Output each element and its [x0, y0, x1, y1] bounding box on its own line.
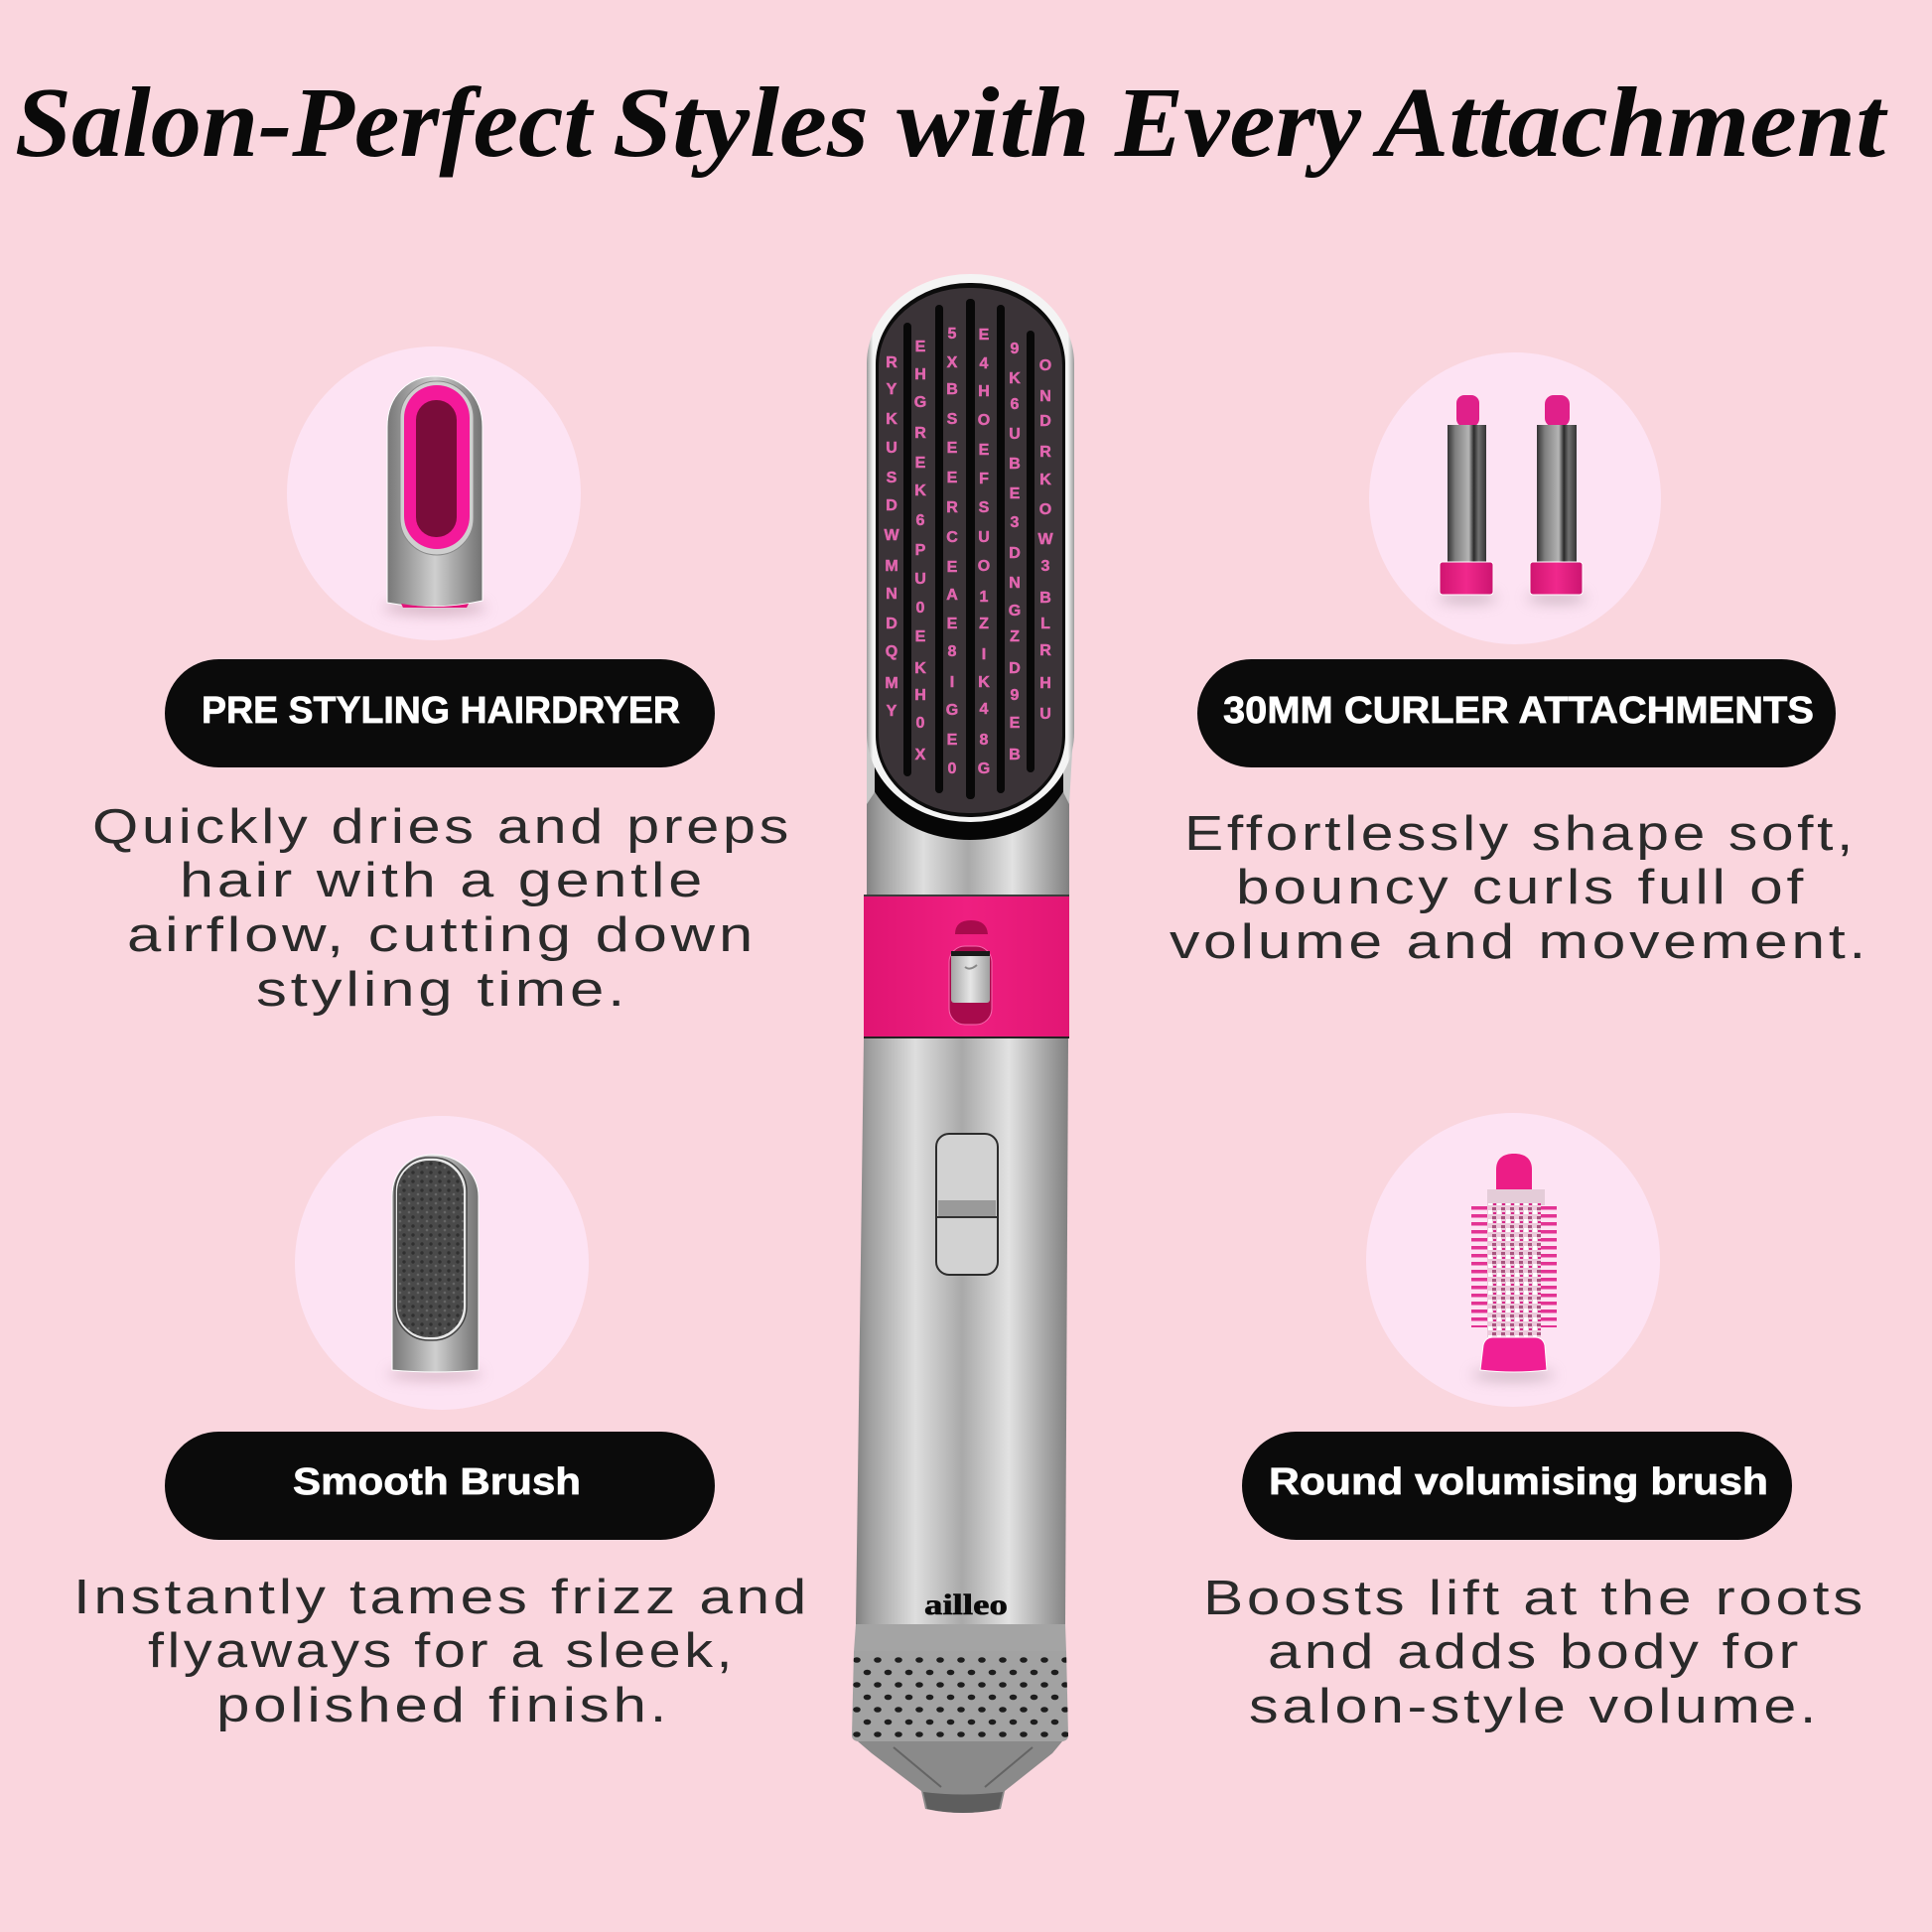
neck side highlights [867, 735, 1073, 804]
brush head pink bristle markings: E4HOEFSUO1ZIK48G [978, 327, 990, 777]
description: smooth brush: Instantly tames frizz and [73, 1571, 810, 1624]
description: round volumising brush: Boosts lift at the roots [1203, 1572, 1866, 1625]
label pill: smooth brush [165, 1432, 715, 1540]
logo: ailleo: ailleo [924, 1588, 1008, 1621]
description: pre styling hairdryer: styling time. [256, 963, 628, 1017]
label pill: round volumising brush: Round volumising brush [1269, 1461, 1768, 1503]
description: 30mm curler attachments: bouncy curls full of [1236, 861, 1807, 914]
label pill: pre styling hairdryer: PRE STYLING HAIRDRYER [202, 690, 680, 732]
label pill: round volumising brush [1242, 1432, 1792, 1540]
lower metal body [856, 1038, 1068, 1624]
description: round volumising brush: and adds body for [1268, 1625, 1802, 1679]
slider switch on pink band [949, 920, 992, 1025]
icon: smooth brush attachment [295, 1116, 589, 1410]
brush head pink bristle markings: 5XBSEERCEAE8IGE0 [946, 326, 958, 777]
panel: pre styling hairdryer [92, 346, 792, 1017]
label pill: smooth brush: Smooth Brush [293, 1461, 581, 1503]
brush head pink bristle markings: ONDRKOW3BLRHU [1037, 357, 1053, 723]
description: smooth brush [73, 1571, 810, 1732]
title: Every [1114, 67, 1362, 178]
title: Attachment [1372, 67, 1888, 178]
icon: round volumising brush attachment [1366, 1113, 1660, 1407]
description: pre styling hairdryer: hair with a gentle [180, 854, 706, 907]
description: pre styling hairdryer [92, 800, 792, 1017]
black crescent under brush head [874, 745, 1064, 840]
description: round volumising brush: salon-style volume. [1249, 1680, 1820, 1733]
icon: two curler barrels [1369, 352, 1661, 644]
description: smooth brush: polished finish. [216, 1679, 670, 1732]
description: 30mm curler attachments: volume and movement. [1170, 915, 1869, 969]
title: Salon-Perfect [15, 67, 595, 178]
brush head pink bristle markings: EHGREK6PU0EKH0X [914, 339, 926, 763]
brush head rim [867, 274, 1074, 822]
title: with [897, 67, 1090, 178]
description: round volumising brush [1203, 1572, 1866, 1733]
label pill: 30mm curler attachments [1197, 659, 1836, 767]
foot cap [858, 1741, 1062, 1813]
description: pre styling hairdryer: Quickly dries and preps [92, 800, 792, 854]
styler neck [867, 764, 1069, 897]
panel: smooth brush [73, 1116, 810, 1732]
brush head pink bristle markings: 9K6UBE3DNGZD9EB [1009, 341, 1021, 763]
icon: pre styling hairdryer attachment [287, 346, 581, 640]
brush head slots [903, 299, 1035, 799]
metal collar [854, 1624, 1066, 1652]
label pill: 30mm curler attachments: 30MM CURLER ATTACHMENTS [1223, 690, 1814, 732]
brush head pink bristle markings [884, 326, 1053, 777]
brush head pink bristle markings: RYKUSDWMNDQMY [884, 354, 899, 720]
description: pre styling hairdryer: airflow, cutting down [127, 908, 757, 962]
description: smooth brush: flyaways for a sleek, [148, 1624, 736, 1678]
panel: 30mm curler attachments [1170, 352, 1869, 969]
power button [936, 1134, 998, 1275]
title [15, 67, 1888, 178]
air intake vent [852, 1651, 1068, 1741]
title: Styles [613, 67, 869, 178]
brush head pad [876, 283, 1065, 817]
description: 30mm curler attachments: Effortlessly shape soft, [1184, 807, 1857, 861]
pink band [864, 897, 1069, 1037]
central product: hair styler [852, 274, 1074, 1813]
panel: round volumising brush [1203, 1113, 1866, 1733]
label pill: pre styling hairdryer [165, 659, 715, 767]
description: 30mm curler attachments [1170, 807, 1869, 969]
